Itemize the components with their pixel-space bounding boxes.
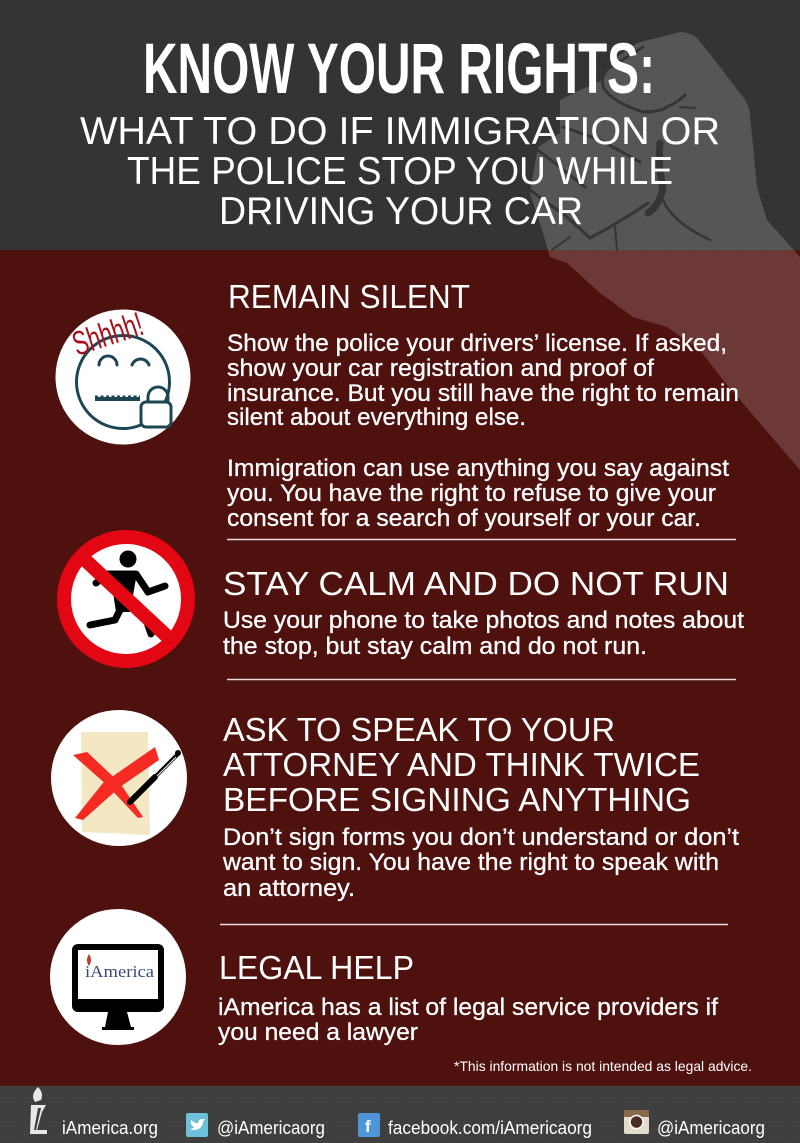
text block: stay calm	[223, 607, 744, 660]
heading: ask to speak to your attorney: ASK TO SPEAK TO YOUR	[223, 711, 615, 748]
text block: remain silent: Show the police your drivers’ license. If asked,	[227, 330, 727, 357]
icon: computer monitor with iAmerica logo: iAmerica	[85, 962, 154, 981]
icon: facebook: f	[365, 1117, 371, 1136]
icon: twitter	[186, 1113, 208, 1137]
text block: remain silent: show your car registration and proof of	[227, 355, 654, 382]
text block: remain silent: silent about everything else.	[227, 404, 526, 431]
text block: remain silent: insurance. But you still have the right to remain	[227, 380, 739, 407]
footer: instagram handle: @iAmericaorg	[657, 1118, 765, 1138]
heading: legal help: LEGAL HELP	[219, 949, 414, 986]
icon: silent face with zipper and lock	[56, 305, 190, 444]
text block: attorney: Don’t sign forms you don’t understand or don’t	[223, 824, 739, 851]
footer: website: iAmerica.org	[62, 1118, 158, 1138]
subtitle: THE POLICE STOP YOU WHILE	[127, 150, 673, 193]
icon: crossed out paper and pen	[51, 710, 187, 846]
text block: attorney: an attorney.	[223, 875, 355, 902]
icon: iAmerica torch logo	[30, 1087, 47, 1134]
footer: facebook address: facebook.com/iAmericaorg	[388, 1118, 592, 1138]
text block: legal help: iAmerica has a list of legal service providers if	[218, 994, 718, 1021]
icon: computer monitor with iAmerica logo	[50, 909, 186, 1045]
text block: remain silent: Immigration can use anything you say against	[227, 455, 729, 482]
icon: raised fist watermark	[530, 32, 800, 470]
subtitle: DRIVING YOUR CAR	[219, 190, 583, 233]
text block: remain silent: you. You have the right to refuse to give your	[227, 480, 716, 507]
subtitle	[80, 110, 720, 233]
text block: stay calm: the stop, but stay calm and do not run.	[223, 633, 647, 660]
text block: attorney: want to sign. You have the right to speak with	[222, 849, 719, 876]
panel: footer background	[0, 1086, 800, 1143]
disclaimer: *This information is not intended as legal advice.	[454, 1058, 752, 1074]
icon: no running sign	[64, 537, 188, 661]
heading: ask to speak to your attorney	[223, 711, 700, 818]
icon: instagram	[624, 1110, 649, 1134]
heading: ask to speak to your attorney: ATTORNEY AND THINK TWICE	[223, 746, 700, 783]
text block: remain silent	[227, 330, 739, 532]
footer: twitter handle: @iAmericaorg	[217, 1118, 325, 1138]
text block: remain silent: consent for a search of yourself or your car.	[227, 505, 701, 532]
text block: legal help: you need a lawyer	[218, 1019, 418, 1046]
heading: remain silent: REMAIN SILENT	[228, 278, 470, 315]
text block: legal help	[218, 994, 718, 1046]
heading: ask to speak to your attorney: BEFORE SIGNING ANYTHING	[223, 781, 691, 818]
subtitle: WHAT TO DO IF IMMIGRATION OR	[80, 110, 720, 153]
heading: stay calm: STAY CALM AND DO NOT RUN	[223, 565, 729, 602]
panel: main red background	[0, 250, 800, 1086]
text block: stay calm: Use your phone to take photos and notes about	[223, 607, 744, 634]
icon: silent face with zipper and lock: Shhhh!	[68, 305, 148, 364]
panel: header background	[0, 0, 800, 250]
text block: attorney	[222, 824, 739, 902]
icon: facebook	[358, 1113, 380, 1137]
